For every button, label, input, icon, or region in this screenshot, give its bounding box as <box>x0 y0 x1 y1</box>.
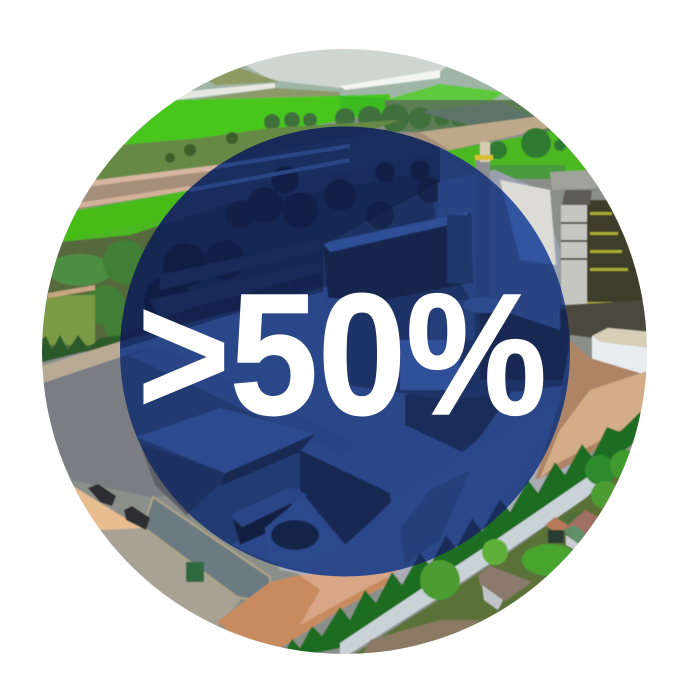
faded roads under navy <box>190 146 350 190</box>
conifer hedge <box>280 412 648 660</box>
big percentage figure: >50% <box>138 259 547 452</box>
orange ground <box>217 575 400 648</box>
far right shrubs <box>489 128 566 179</box>
fence conifers left <box>35 272 322 364</box>
gravel strip <box>143 497 270 600</box>
aerial photo of power plant in circle <box>42 49 647 654</box>
concrete strip <box>35 286 340 384</box>
dark gravel lot <box>300 450 391 545</box>
asphalt yard <box>44 358 265 498</box>
chimney stack <box>463 142 503 313</box>
dark vegetation shade <box>110 120 440 352</box>
brown ground right <box>535 340 650 480</box>
dirt road <box>78 132 450 210</box>
sand and concrete bottom-left <box>74 486 142 531</box>
distant village trees <box>264 100 565 132</box>
back boiler hall <box>438 170 560 330</box>
left vegetation <box>47 174 436 352</box>
rice field upper <box>124 94 390 146</box>
apron stains <box>400 470 470 565</box>
infographic <box>42 49 647 654</box>
white building <box>592 328 650 376</box>
navy overlay circle <box>120 126 570 576</box>
village houses <box>478 510 600 610</box>
white wall <box>339 476 596 654</box>
sky haze and greenhouses <box>176 49 513 101</box>
boiler tower and scaffold <box>550 170 650 345</box>
hangar <box>138 408 320 550</box>
light apron <box>233 490 366 576</box>
scrub band <box>96 120 399 180</box>
green field lower <box>50 130 600 245</box>
garden below wall <box>354 475 619 654</box>
black containers <box>88 484 204 582</box>
plant machinery <box>346 284 570 398</box>
dark main building box <box>323 213 473 300</box>
